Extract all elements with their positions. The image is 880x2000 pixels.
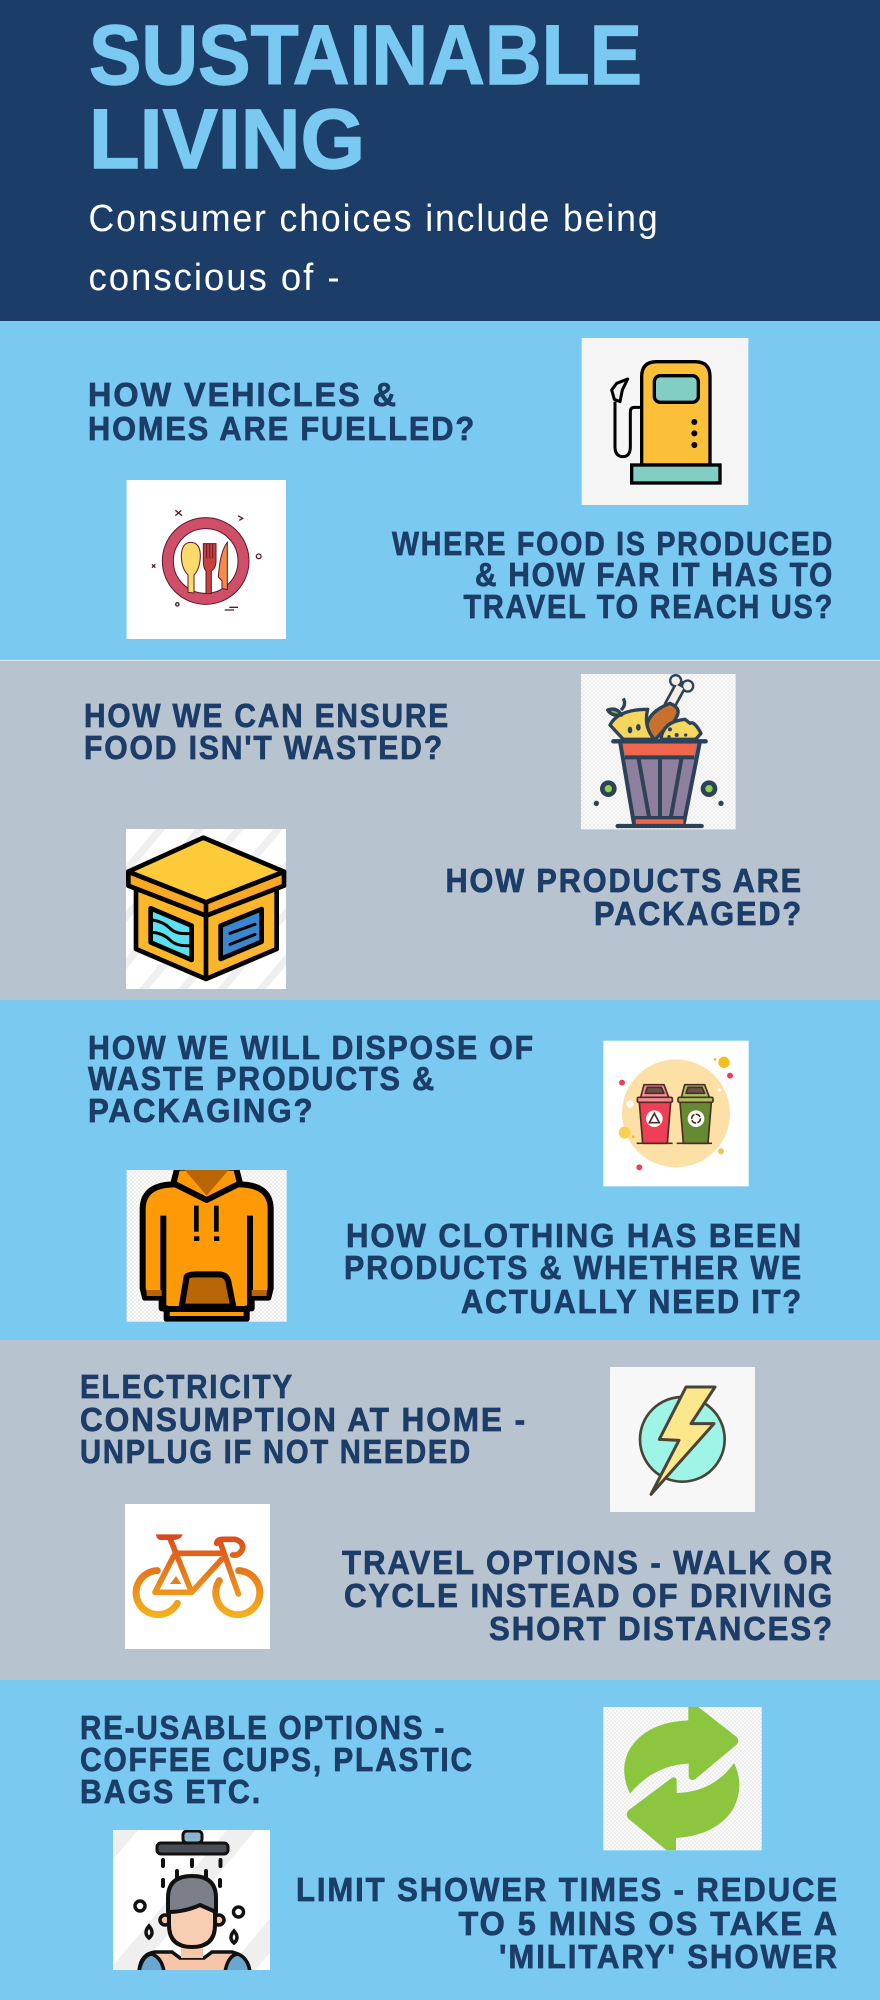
icon: plate and cutlery [127,480,286,639]
icon: recycling bins [603,1041,749,1186]
heading: food production: & HOW FAR IT HAS TO [475,556,834,593]
heading: packaging: HOW PRODUCTS ARE [446,862,803,899]
heading: electricity: ELECTRICITY [80,1368,294,1405]
heading: travel [342,1544,834,1647]
icon: fuel pump [582,338,748,505]
heading: disposal [88,1029,535,1129]
heading: travel: TRAVEL OPTIONS - WALK OR [342,1544,834,1581]
title: LIVING [89,92,365,186]
icon: green recycle arrows [603,1707,762,1850]
panel: header [0,0,880,321]
title [89,8,642,186]
heading: disposal: HOW WE WILL DISPOSE OF [88,1029,535,1066]
icon: cardboard box [126,829,286,989]
subtitle: conscious of - [88,257,342,299]
icon: food waste bin [581,674,736,829]
title: SUSTAINABLE [89,8,642,102]
icon: lightning bolt [610,1367,755,1512]
heading: reusable options: COFFEE CUPS, PLASTIC [80,1741,474,1778]
heading: shower times: 'MILITARY' SHOWER [499,1938,839,1975]
panel: electricity and travel [0,1340,880,1680]
icon: hoodie [127,1168,287,1322]
heading: food waste [84,697,450,766]
heading: food waste: FOOD ISN'T WASTED? [84,729,444,766]
heading: vehicles and homes: HOMES ARE FUELLED? [88,410,476,447]
heading: vehicles and homes: HOW VEHICLES & [88,376,398,413]
heading: disposal: WASTE PRODUCTS & [88,1060,436,1097]
heading: shower times: TO 5 MINS OS TAKE A [458,1905,839,1942]
heading: clothing: HOW CLOTHING HAS BEEN [346,1217,803,1254]
heading: clothing: PRODUCTS & WHETHER WE [344,1249,803,1286]
heading: food production: TRAVEL TO REACH US? [464,588,834,625]
panel: fuel and food [0,321,880,660]
heading: electricity: UNPLUG IF NOT NEEDED [80,1433,472,1470]
heading: food waste: HOW WE CAN ENSURE [84,697,450,734]
heading: packaging [446,862,803,932]
panel: disposal and clothing [88,1035,800,1322]
heading: electricity: CONSUMPTION AT HOME - [80,1401,527,1438]
heading: packaging: PACKAGED? [594,895,803,932]
heading: clothing: ACTUALLY NEED IT? [461,1283,803,1320]
heading: shower times [296,1871,839,1975]
heading: reusable options: BAGS ETC. [80,1773,262,1810]
heading: food production [392,525,834,625]
heading: vehicles and homes [88,376,476,447]
heading: disposal: PACKAGING? [88,1092,314,1129]
icon: person showering [113,1830,270,1972]
heading: clothing [344,1217,803,1320]
heading: reusable options [80,1709,474,1810]
panel: food waste and packaging [0,661,880,1000]
icon: bicycle [125,1504,270,1649]
subtitle: Consumer choices include being [88,198,660,240]
heading: shower times: LIMIT SHOWER TIMES - REDUCE [296,1871,839,1908]
subtitle [88,198,660,299]
panel: reusables and showers [80,1707,837,1970]
heading: travel: CYCLE INSTEAD OF DRIVING [344,1577,834,1614]
heading: travel: SHORT DISTANCES? [489,1610,834,1647]
heading: reusable options: RE-USABLE OPTIONS - [80,1709,446,1746]
heading: electricity [80,1368,527,1470]
